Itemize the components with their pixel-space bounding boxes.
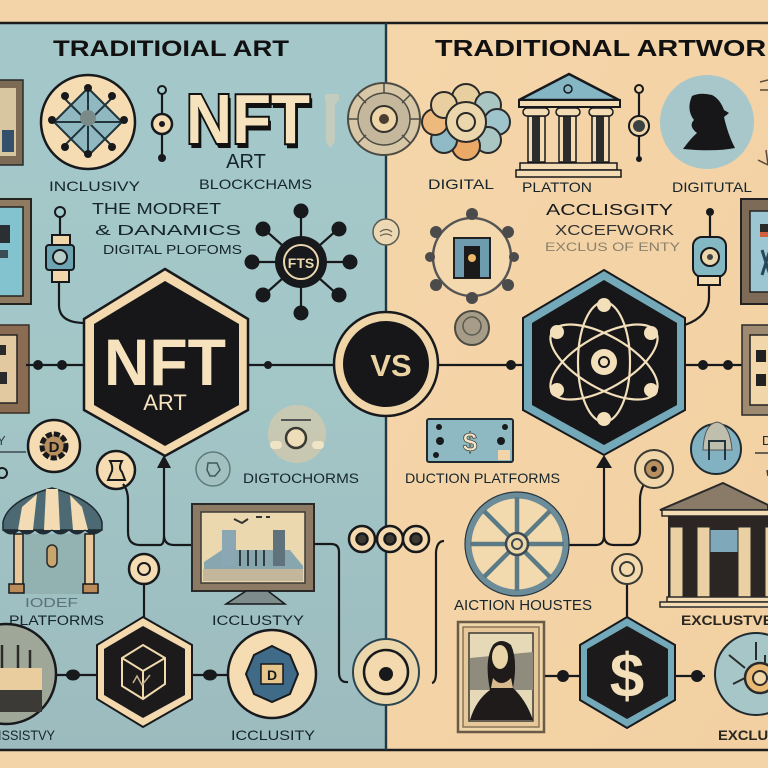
text: exclusivity label: EXCLUSTVE [681, 612, 768, 628]
hexagon: dollar badge [580, 617, 675, 728]
text: right edge fragment [755, 433, 768, 476]
text: platform label: PLATTON [522, 179, 592, 195]
icon: lower centre ring [353, 639, 419, 705]
text: auction platforms label: DUCTION PLATFORMS [405, 470, 560, 486]
panel: NFT art (left) [0, 23, 386, 750]
text: digital platforms garbled label: DIGTOCHORMS [243, 471, 359, 486]
icon: banknote with dollar sign: $ [463, 427, 478, 457]
text: blockchains label: BLOCKCHAMS [199, 176, 312, 192]
connector: bracket line [432, 541, 444, 683]
picture frame: left middle [0, 199, 31, 304]
text: auction houses label: AICTION HOUSTES [454, 598, 592, 614]
picture frame: Mona Lisa portrait [458, 622, 544, 732]
heading: left title: TRADITIOIAL ART [53, 36, 290, 61]
icon: wagon wheel [465, 492, 569, 596]
icon: blue sun medallion [715, 633, 768, 715]
connector: cube hexagon to gear circle [192, 670, 228, 680]
heading: right title: TRADITIONAL ARTWORK [435, 35, 768, 61]
text: ART subtitle: ART [226, 151, 266, 173]
icon: faint circle [196, 452, 230, 486]
icon: vertical node connector right [629, 85, 649, 162]
text: large NFT logo: NFT [186, 80, 310, 158]
connector: dollar hexagon to sun circle [675, 670, 705, 682]
hexagon: dollar badge: $ [610, 642, 644, 711]
text: faded stall label: IODEF [25, 595, 78, 610]
hexagon: cube badge [97, 617, 192, 727]
icon: blockchain network hub: FTS [288, 255, 314, 271]
picture frame: right upper [741, 199, 768, 304]
text: inclusivity label: INCLUSIVY [49, 178, 141, 194]
icon: centre target dial [348, 83, 420, 155]
connectors: wheel to hexagon and target [569, 455, 648, 545]
connector: portrait to dollar hexagon [545, 670, 581, 682]
icon: vertical node connector left [152, 86, 172, 162]
text: icclusivity under monitor: ICCLUSTYY [212, 613, 304, 628]
icon: faint camera badge [268, 405, 326, 463]
icon: target circle [635, 450, 673, 488]
connector: monitor to lower right ring [314, 544, 348, 682]
icon: market stall awning [3, 488, 102, 594]
hexagon: NFT ART badge: ART [143, 390, 187, 415]
text: dynamics line: & DANAMICS [95, 222, 241, 239]
text: the modret: THE MODRET [92, 201, 221, 218]
icon: camera connector [46, 207, 85, 323]
connector: VS to atom hexagon [438, 360, 524, 370]
connector: left frame to NFT hexagon [26, 360, 85, 370]
icon: monitor with artwork [192, 504, 314, 604]
text: platforms label: PLATFORMS [9, 612, 104, 628]
text: acclisgity: ACCLISGITY [546, 202, 673, 219]
icon: blue gear medallion: D [267, 667, 277, 683]
icon: keyhole medallion [97, 451, 135, 489]
icon: large temple with blue door [660, 483, 768, 607]
picture frame: top left [0, 80, 23, 165]
icon: ring of nodes with doorway [425, 208, 519, 304]
icon: blockchain network hub [244, 204, 358, 320]
icon: banknote with dollar sign [427, 419, 513, 462]
hexagon: atom badge [523, 270, 685, 455]
icon: blue portrait circle with silhouette [660, 75, 754, 169]
icon: small target circle left [129, 554, 159, 617]
connector: NFT hexagon to VS [247, 361, 334, 369]
icon: grey coin [455, 311, 489, 345]
icon: blue gear medallion [228, 630, 316, 718]
icon: gear medallion: D [49, 439, 60, 456]
text: digital platforms line: DIGITAL PLOFOMS [103, 242, 242, 257]
panel: traditional artwork (right) [386, 23, 768, 750]
icon: target circle above dollar hexagon [612, 554, 642, 617]
text: digitutal label: DIGITUTAL [672, 179, 752, 195]
text: large NFT logo: NFT [188, 84, 312, 162]
icon: faint sketch far right [758, 80, 768, 165]
connectors: medallion and arrow to monitor [123, 455, 192, 545]
hexagon: NFT ART badge: NFT [104, 325, 226, 399]
badge: VS: VS [370, 348, 412, 383]
icon: network star medallion [41, 75, 135, 169]
icon: gear medallion [28, 420, 80, 472]
icon: classical temple [516, 74, 621, 177]
picture frame: left lower [0, 325, 29, 413]
icon: chain of three rings [349, 526, 429, 552]
text: xccerwork: XCCEFWORK [555, 222, 674, 239]
icon: small cream badge [373, 219, 399, 245]
text: inclusivity bottom label: ICCLUSITY [231, 727, 316, 743]
text: digital label: DIGITAL [428, 176, 494, 192]
connector: atom hexagon to right frame [684, 360, 745, 370]
icon: left edge fragment label [0, 433, 26, 478]
text: exclusion of entry: EXCLUS OF ENTY [545, 240, 680, 254]
icon: right camera connector [685, 208, 726, 325]
picture frame: right lower [742, 325, 768, 415]
badge: VS [334, 312, 438, 416]
hexagon: NFT ART badge [84, 269, 248, 456]
icon: faint pin [325, 94, 339, 148]
icon: flower of coloured petals [422, 84, 510, 160]
icon: partial workshop circle [0, 624, 56, 724]
connector: workshop to cube hexagon [55, 670, 97, 680]
icon: dome lock circle [691, 422, 741, 474]
